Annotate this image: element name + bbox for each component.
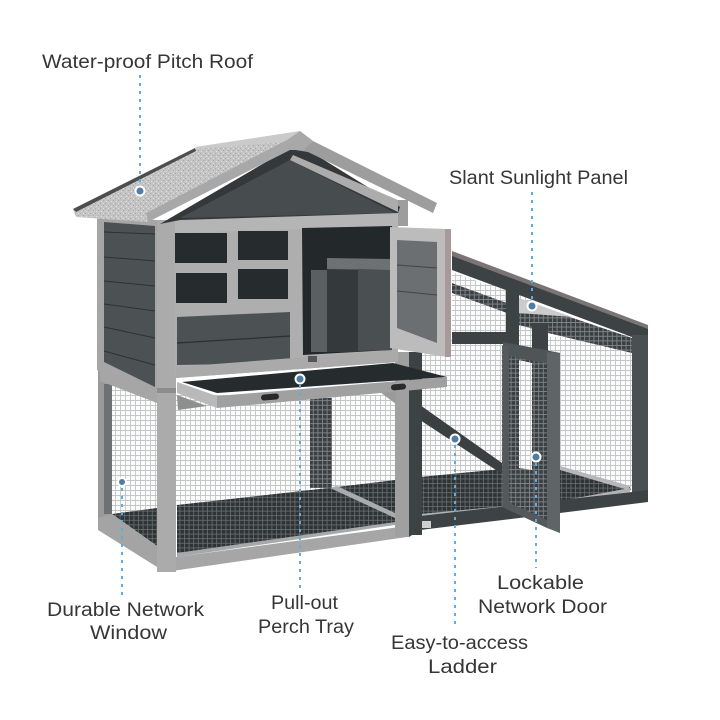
- label: pull-out perch tray: Perch Tray: [258, 617, 355, 638]
- door stile: [547, 352, 560, 533]
- label: slant sunlight panel: Slant Sunlight Panel: [449, 168, 628, 189]
- dot: sunlight panel: [528, 302, 536, 310]
- door panel: [397, 240, 437, 343]
- lockable network door: [502, 342, 560, 533]
- outdoor run at right: [409, 251, 648, 537]
- front back mesh: [176, 395, 396, 507]
- gable: [180, 160, 395, 218]
- pull-out perch tray: [177, 363, 447, 410]
- run top beam: [452, 252, 648, 343]
- door opening interior: [302, 226, 392, 355]
- run roof mesh: [452, 283, 507, 313]
- side plank lines: [104, 232, 155, 365]
- label: easy-to-access ladder: [391, 633, 528, 678]
- door edge: [445, 229, 451, 357]
- right front post: [395, 352, 409, 537]
- tray front: [217, 377, 447, 408]
- run back mesh: [420, 335, 632, 487]
- ladder ramp: [420, 405, 502, 474]
- dot: roof: [136, 186, 144, 196]
- dot: window: [118, 478, 126, 486]
- leader lines: [122, 75, 536, 628]
- label: durable network window: [47, 600, 205, 644]
- left roof surface: [73, 142, 286, 222]
- run back posts: [532, 323, 548, 353]
- door frame: [390, 227, 447, 357]
- left fascia: [146, 131, 313, 222]
- run bottom rail: [409, 490, 648, 537]
- post shadow: [157, 388, 176, 393]
- roof: [73, 131, 437, 222]
- left side wall: [97, 217, 157, 392]
- label: pull-out perch tray: [258, 593, 355, 638]
- dot: ladder: [450, 434, 460, 444]
- rail latch: [422, 521, 431, 528]
- right corner post: [398, 200, 408, 226]
- tray left side: [177, 382, 217, 408]
- tray left bracket: [177, 395, 207, 410]
- under-eave shadow: [160, 148, 400, 224]
- right fascia: [295, 141, 437, 213]
- label: durable network window: Durable Network: [47, 600, 205, 621]
- tray handles: [261, 393, 279, 401]
- floor tray: [177, 480, 395, 556]
- bottom front rail: [176, 350, 398, 378]
- lower enclosure: [98, 220, 422, 572]
- line: ladder: [454, 445, 456, 628]
- line: tray: [299, 385, 301, 590]
- window panes: [175, 231, 288, 303]
- house upper body: [97, 148, 408, 392]
- line: network door: [535, 463, 537, 568]
- left rear leg: [98, 370, 112, 525]
- tray top: [182, 363, 447, 393]
- marker dots: [118, 186, 540, 486]
- run floor: [420, 468, 631, 516]
- gable inner trim: [290, 155, 398, 212]
- label: durable network window: Window: [90, 623, 167, 644]
- right dark post: [409, 352, 422, 535]
- front bottom rail: [160, 526, 407, 572]
- label: pull-out perch tray: Pull-out: [271, 593, 339, 614]
- label: easy-to-access ladder: Ladder: [428, 657, 498, 678]
- latch: [308, 356, 317, 362]
- side mesh: [110, 384, 157, 514]
- line: roof: [139, 75, 141, 187]
- lower front planks: [177, 312, 290, 365]
- ridge cap: [195, 131, 313, 151]
- dot: network door: [532, 452, 540, 462]
- back post: [310, 398, 332, 488]
- side rails: [100, 369, 157, 403]
- line: sunlight panel: [531, 192, 533, 302]
- label: lockable network door: Lockable: [497, 573, 584, 594]
- run end post: [632, 335, 648, 500]
- front wall frame: [175, 212, 398, 378]
- label: easy-to-access ladder: Easy-to-access: [391, 633, 528, 654]
- label: lockable network door: [478, 573, 608, 618]
- label: water-proof pitch roof: Water-proof Pitch Roof: [42, 52, 254, 73]
- top beam: [175, 213, 398, 233]
- nest door open: [390, 227, 451, 357]
- line: window: [121, 488, 123, 598]
- door mesh: [502, 342, 560, 533]
- front left post: [157, 220, 176, 572]
- label: lockable network door: Network Door: [478, 597, 608, 618]
- dot: tray: [296, 374, 304, 384]
- tray right bracket: [380, 390, 396, 404]
